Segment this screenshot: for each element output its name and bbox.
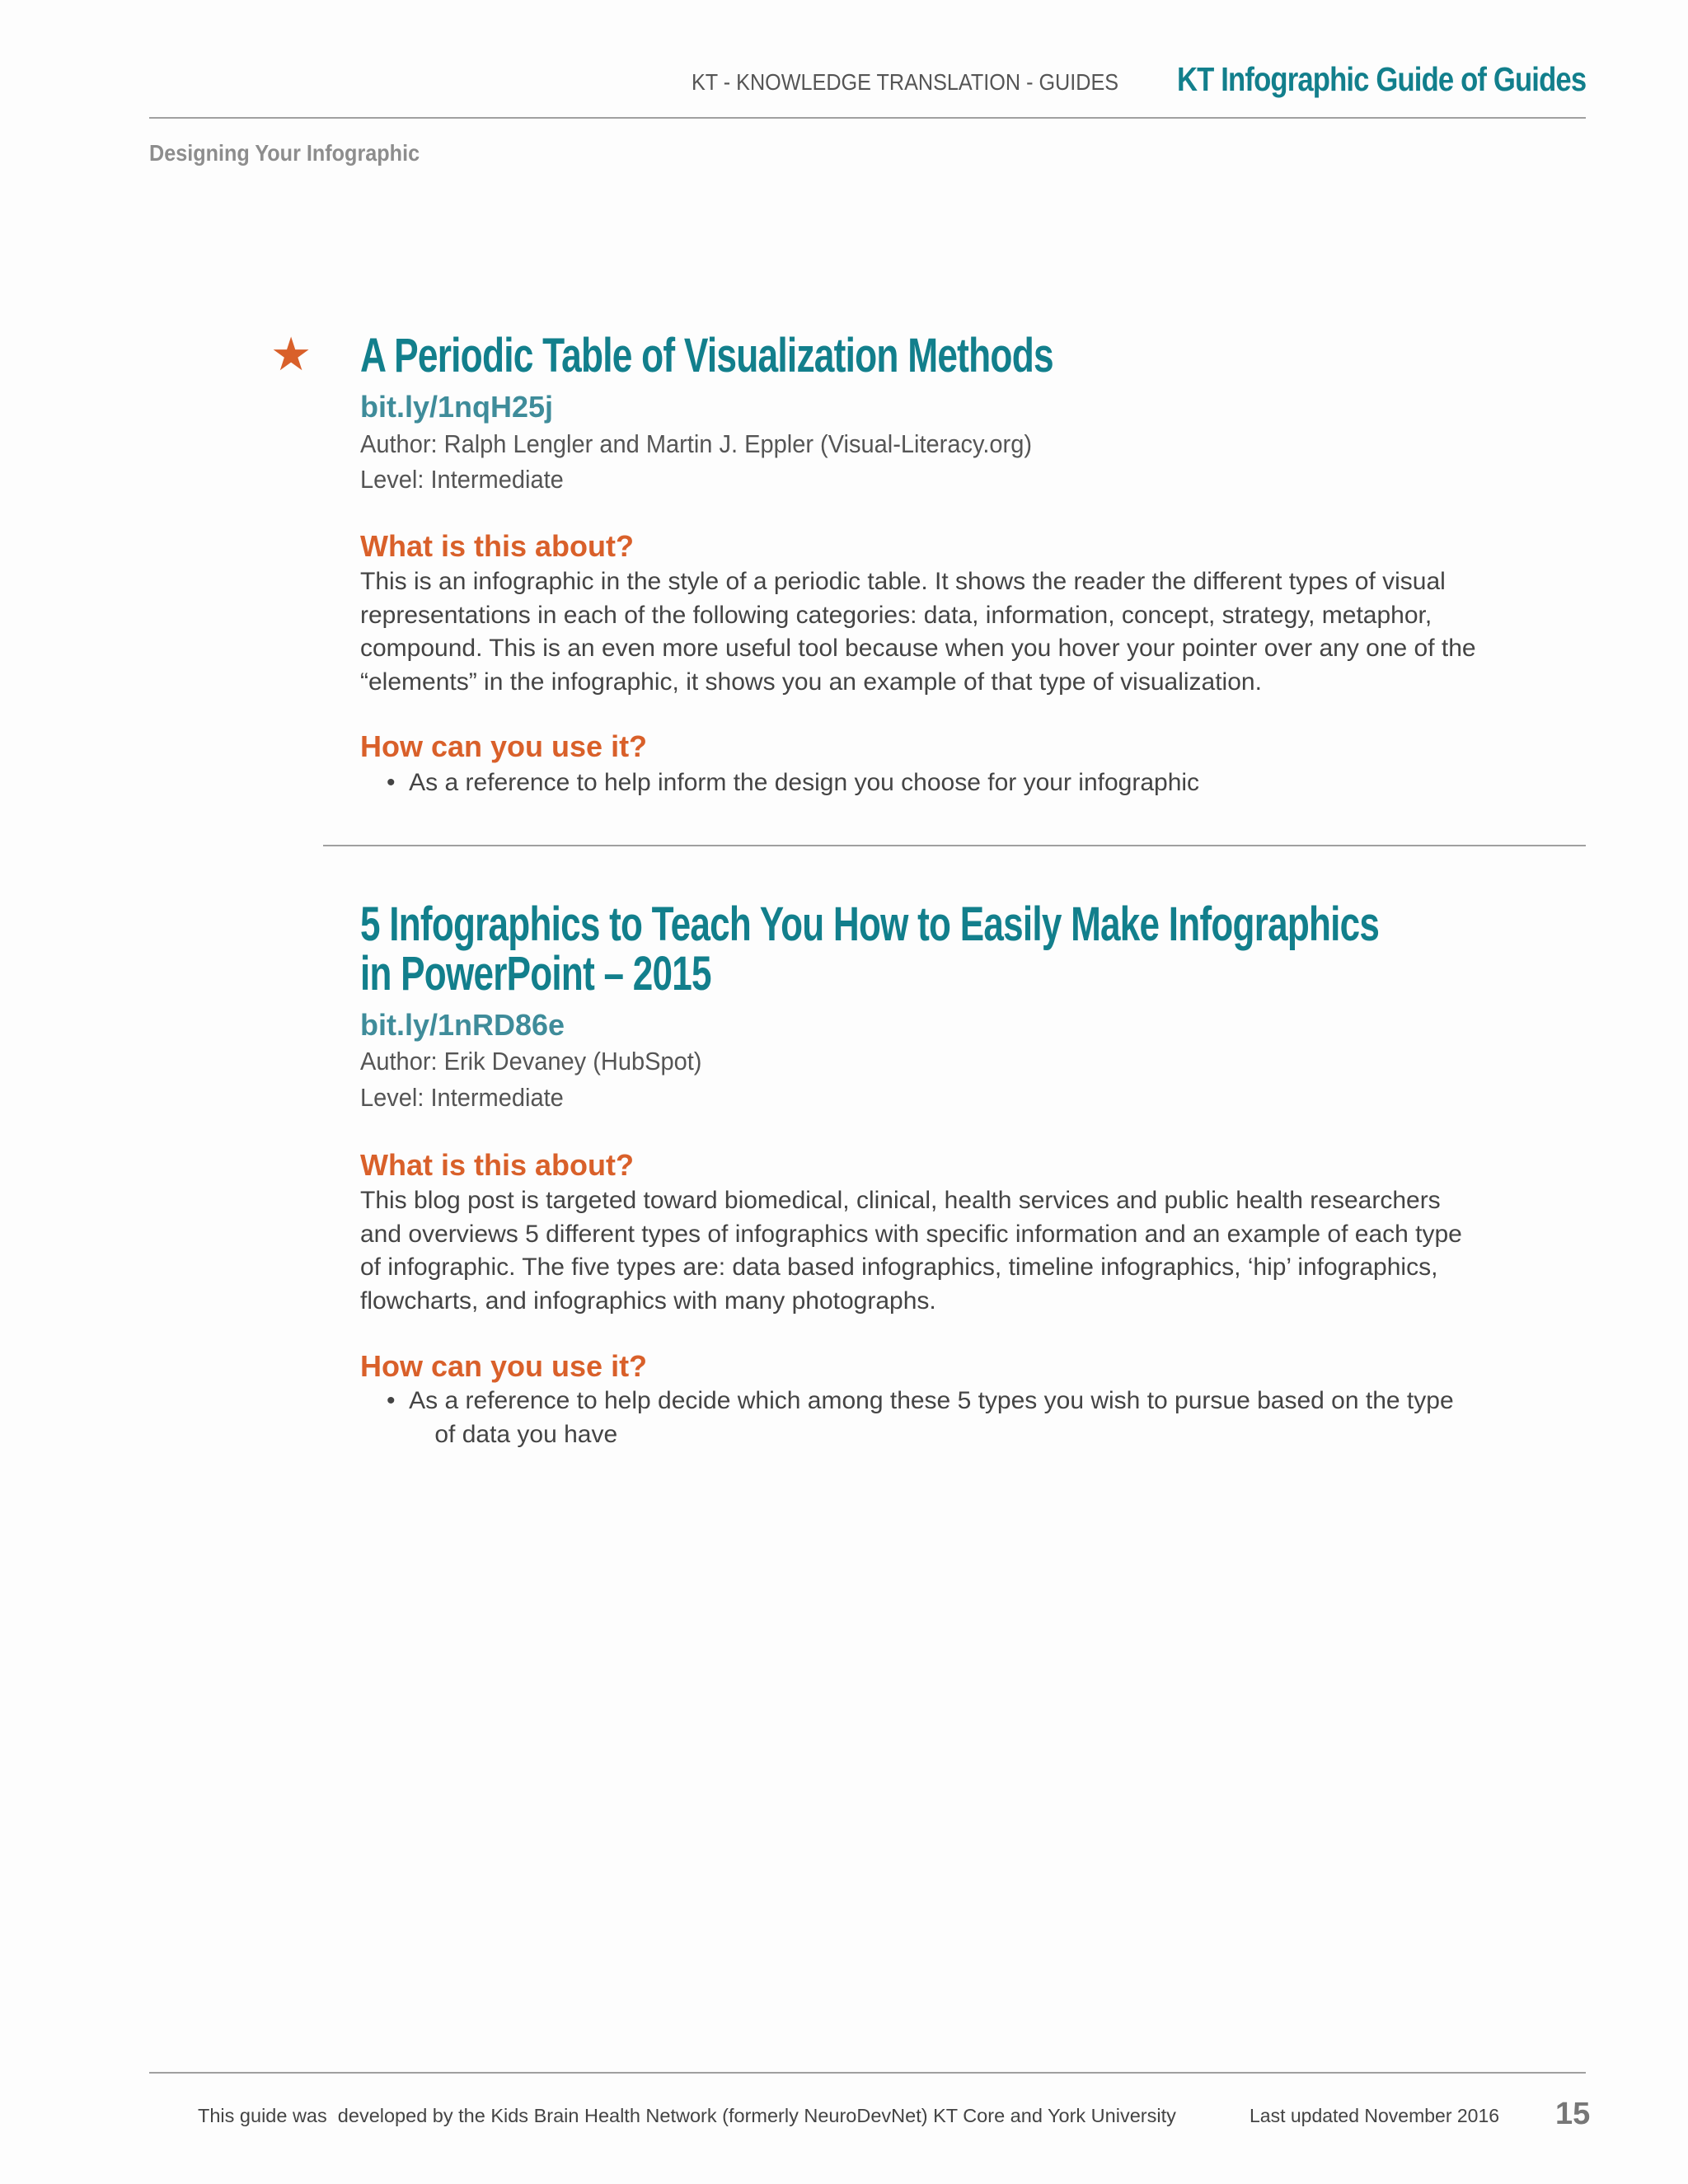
footer: updated: Last updated November 2016 (1250, 2105, 1499, 2126)
author 1: Author: Ralph Lengler and Martin J. Eppler (Visual-Literacy.org) (360, 429, 1032, 458)
title 1: A Periodic Table of Visualization Methods (360, 329, 1053, 382)
title 2: in PowerPoint – 2015 (360, 947, 711, 1001)
body 1: representations in each of the following categories: data, information, concept, strategy, metaphor, (360, 602, 1432, 628)
bullet 2: • As a reference to help decide which among these 5 types you wish to pursue based on the type (387, 1387, 1454, 1414)
level 2: Level: Intermediate (360, 1083, 564, 1112)
body 1: compound. This is an even more useful tool because when you hover your pointer over any one of the (360, 635, 1476, 662)
subheading: section: Designing Your Infographic (149, 140, 420, 166)
resource 1 (360, 329, 1476, 796)
link 1: bit.ly/1nqH25j (360, 390, 553, 424)
bullet 2 (387, 1387, 1454, 1447)
heading: what 2: What is this about? (360, 1148, 634, 1182)
heading: how 1: How can you use it? (360, 729, 647, 763)
header: section label: KT - KNOWLEDGE TRANSLATION - GUIDES (692, 69, 1118, 95)
body 2: This blog post is targeted toward biomedical, clinical, health services and public health researchers (360, 1187, 1441, 1214)
link 2: bit.ly/1nRD86e (360, 1008, 565, 1042)
body 2: and overviews 5 different types of infographics with specific information and an example of each type (360, 1220, 1462, 1248)
icon: star: ★ (270, 328, 312, 380)
title 2: 5 Infographics to Teach You How to Easily Make Infographics (360, 898, 1379, 951)
heading: how 2: How can you use it? (360, 1349, 647, 1383)
level 1: Level: Intermediate (360, 465, 564, 494)
author 2: Author: Erik Devaney (HubSpot) (360, 1047, 701, 1076)
bullet 1: • As a reference to help inform the design you choose for your infographic (387, 769, 1199, 796)
body 2 (360, 1187, 1462, 1314)
footer: page number: 15 (1555, 2097, 1590, 2131)
footer: credit: This guide was developed by the Kids Brain Health Network (formerly NeuroDevNet) KT Core and York University (198, 2105, 1176, 2126)
title 2 (360, 898, 1379, 1001)
heading: what 1: What is this about? (360, 529, 634, 563)
body 1 (360, 568, 1476, 696)
body 1: This is an infographic in the style of a periodic table. It shows the reader the different types of visual (360, 568, 1446, 595)
body 2: flowcharts, and infographics with many photographs. (360, 1287, 936, 1314)
body 2: of infographic. The five types are: data based infographics, timeline infographics, ‘hip’ infographics, (360, 1254, 1437, 1281)
body 1: “elements” in the infographic, it shows you an example of that type of visualization. (360, 668, 1262, 696)
header: guide title: KT Infographic Guide of Guides (1177, 60, 1586, 98)
bullet 2: of data you have (434, 1421, 617, 1447)
resource 2 (360, 898, 1462, 1447)
